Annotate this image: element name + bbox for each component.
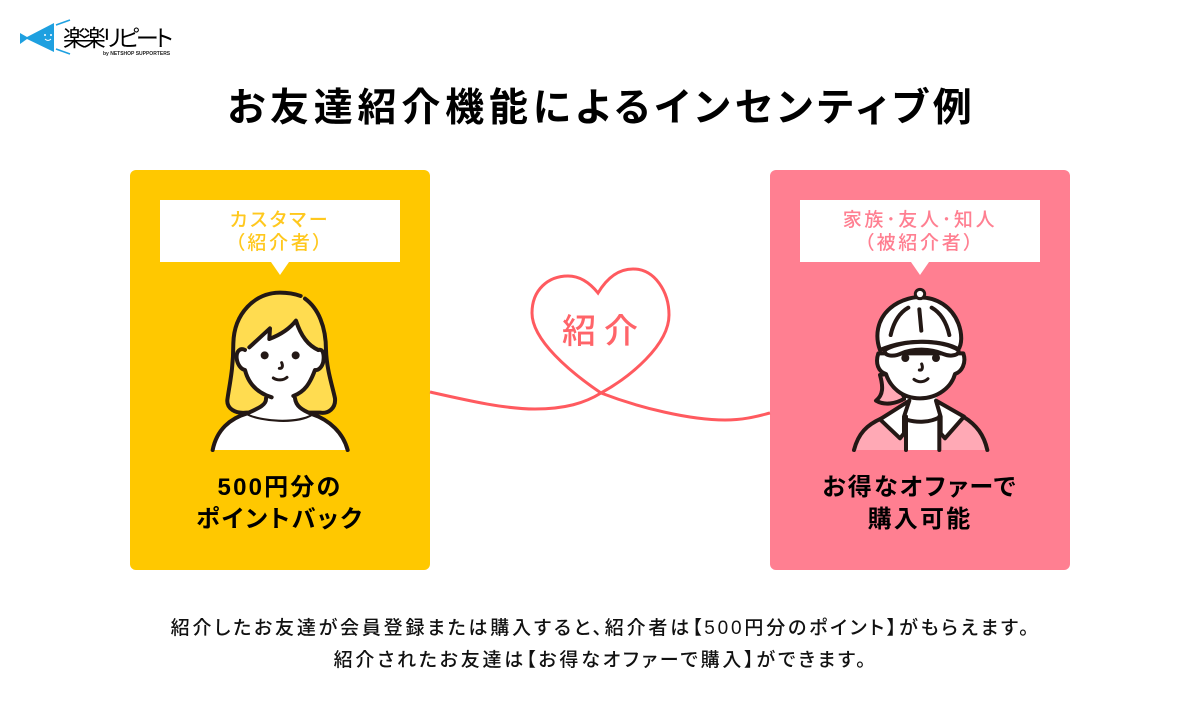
description text bbox=[171, 618, 1031, 671]
description text: 紹介されたお友達は【お得なオファーで購入】ができます。 bbox=[334, 650, 868, 671]
icon: megaphone fish bbox=[20, 19, 70, 55]
panel: family and friends (referred) bbox=[770, 170, 1070, 570]
heart label: 紹介 bbox=[562, 313, 646, 351]
title: お友達紹介機能によるインセンティブ例 bbox=[227, 87, 977, 130]
description text: 紹介したお友達が会員登録または購入すると、紹介者は【500円分のポイント】がもらえます。 bbox=[171, 618, 1031, 639]
speech bubble: customer label: カスタマー bbox=[230, 210, 330, 231]
offer text: customer: 500円分の bbox=[218, 474, 342, 501]
speech bubble: customer label: （紹介者） bbox=[235, 233, 325, 254]
offer text: customer bbox=[196, 474, 364, 533]
logo wordmark: 楽楽リピート bbox=[63, 25, 170, 51]
speech bubble: friends label: 家族･友人･知人 bbox=[843, 210, 997, 231]
panel: customer (referrer) bbox=[130, 170, 430, 570]
speech bubble: friends label: （被紹介者） bbox=[864, 233, 976, 254]
offer text: customer: ポイントバック bbox=[196, 506, 364, 533]
logo tagline: by NETSHOP SUPPORTERS bbox=[103, 51, 170, 57]
icon: woman with blonde hair bbox=[210, 290, 350, 452]
speech bubble: friends label bbox=[800, 200, 1040, 262]
offer text: friends: 購入可能 bbox=[868, 506, 972, 533]
logo: 楽楽リピート bbox=[20, 19, 172, 57]
offer text: friends: お得なオファーで bbox=[822, 474, 1018, 501]
speech bubble: customer label bbox=[160, 200, 400, 262]
offer text: friends bbox=[822, 474, 1018, 533]
icon: person with cap bbox=[852, 288, 990, 452]
